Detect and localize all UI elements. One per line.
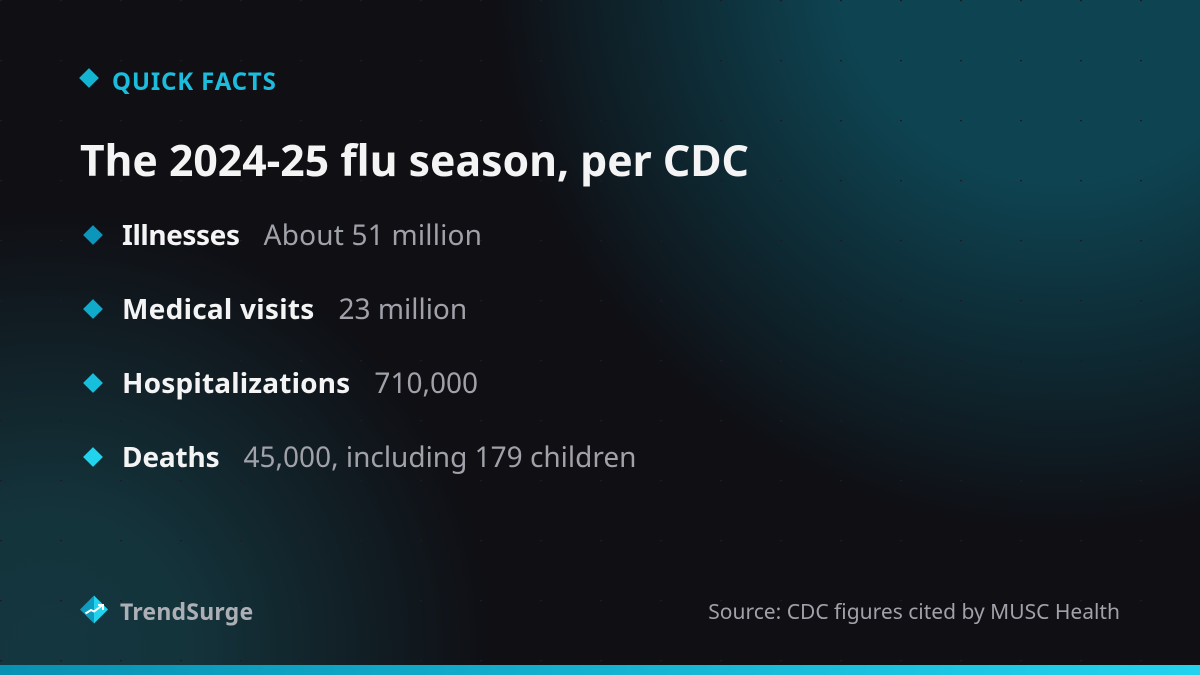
brand: TrendSurge <box>80 595 253 627</box>
fact: illnesses: Illnesses About 51 million <box>122 216 482 254</box>
fact: hospitalizations: Hospitalizations 710,000 <box>122 364 478 402</box>
icon: kicker diamond <box>79 68 99 88</box>
source note: Source: CDC figures cited by MUSC Health <box>708 598 1120 626</box>
fact: deaths: Deaths 45,000, including 179 children <box>122 438 636 476</box>
fact: medical visits: Medical visits 23 million <box>122 290 467 328</box>
kicker: quick facts <box>79 65 277 98</box>
fact list <box>83 216 636 476</box>
title: The 2024-25 flu season, per CDC <box>80 130 749 189</box>
bottom accent bar <box>0 665 1200 675</box>
icon: brand logo <box>80 596 108 624</box>
brand name: TrendSurge <box>120 595 253 627</box>
kicker text: QUICK FACTS <box>112 65 277 98</box>
